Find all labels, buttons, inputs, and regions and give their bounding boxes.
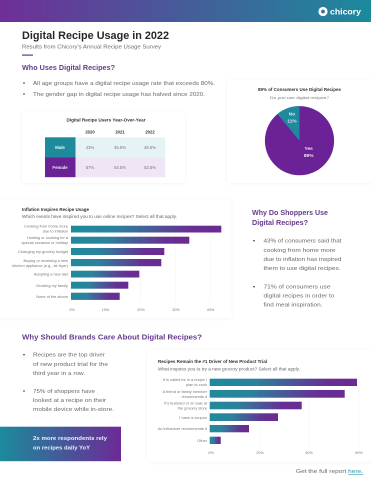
gridlines: [260, 375, 358, 447]
bars: [210, 379, 357, 444]
bar labels: Cooking from home more: [24, 224, 68, 228]
axis labels: 20%: [137, 308, 145, 312]
bar labels: Growing my family: [36, 283, 68, 288]
callout: 2x more respondents rely: [33, 436, 108, 442]
bar labels: due to inflation: [43, 229, 68, 234]
text block: why shoppers bullets: 43% of consumers said that: [264, 239, 342, 245]
header banner: [0, 0, 371, 22]
axis labels: 0%: [208, 451, 214, 455]
text block: who uses bullets: The gender gap in digital recipe usage has halved since 2020.: [33, 92, 205, 98]
bar labels: Adopting a new diet: [34, 272, 69, 277]
footer link text: Get the full report here.: [296, 469, 363, 475]
bar labels: recommends it: [181, 394, 208, 399]
text block: brands bullets: of new product trial for the: [33, 362, 108, 368]
axis labels: 20%: [256, 451, 264, 455]
bar labels: None of the above: [36, 294, 68, 299]
bar labels: It is called for in a recipe I: [163, 377, 207, 382]
text block: brands bullets: looked at a recipe on their: [33, 398, 106, 404]
pie labels: [287, 112, 314, 159]
table row: female: 54.5%: [114, 165, 126, 170]
table column headers: [85, 130, 155, 134]
pie subtitle: Do you use digital recipes?: [270, 95, 330, 100]
title: Digital Recipe Usage in 2022: [22, 30, 169, 42]
axis labels: 10%: [102, 308, 110, 312]
table row: male: 46.5%: [144, 145, 156, 150]
text block: why shoppers bullets: digital recipes in order to: [264, 294, 334, 300]
pie: no 11%: [277, 106, 300, 141]
title accent rule: [22, 54, 33, 56]
text block: brands bullets: 75% of shoppers have: [33, 389, 95, 395]
axis labels: 60%: [355, 451, 363, 455]
heading: why should brands care: Why Should Brands Care About Digital Recipes?: [22, 332, 202, 342]
table column headers: 2021: [115, 130, 125, 134]
axis labels: [208, 451, 363, 455]
axis labels: 40%: [207, 308, 215, 312]
chart title: Inflation Inspires Recipe Usage: [22, 207, 90, 212]
bar labels: plan to cook: [186, 382, 207, 387]
bar labels: An influencer recommends it: [158, 426, 208, 431]
text block: why shoppers bullets: them to use digital recipes.: [264, 266, 341, 272]
heading: why do shoppers use digital recipes: Digital Recipes?: [252, 218, 308, 227]
text block: why shoppers bullets: 71% of consumers use: [264, 285, 330, 291]
table row: male: Male: [55, 145, 65, 150]
chart title: Recipes Remain the #1 Driver of New Product Trial: [158, 359, 267, 364]
bar labels: [158, 377, 208, 443]
bar labels: [12, 224, 69, 299]
table row: male: 45.5%: [114, 145, 126, 150]
chart subtitle: What inspires you to try a new grocery product? Select all that apply.: [158, 366, 300, 372]
text block: brands bullets: mobile device while in-store.: [33, 407, 115, 413]
pie labels: No: [289, 112, 295, 118]
pie labels: Yes: [305, 146, 313, 152]
gridlines: [106, 222, 210, 303]
pie labels: 11%: [287, 118, 297, 124]
table row: male: [45, 137, 165, 158]
bar labels: Other: [197, 438, 208, 443]
text block: brands bullets: [23, 353, 115, 413]
text block: why shoppers bullets: find meal inspiration.: [264, 303, 323, 309]
pie title: 89% of Consumers Use Digital Recipes: [258, 87, 342, 92]
bar labels: A friend or family member: [163, 389, 208, 394]
callout: [0, 427, 121, 461]
axis labels: [69, 308, 215, 312]
table column headers: 2022: [145, 130, 155, 134]
axis labels: 0%: [69, 308, 75, 312]
bar labels: the grocery store: [178, 406, 207, 410]
text block: brands bullets: third year in a row.: [33, 371, 86, 377]
bar labels: Hosting or cooking for a: [27, 235, 69, 240]
callout: on recipes daily YoY: [33, 445, 90, 451]
table row: female: 53.5%: [144, 165, 156, 170]
pie labels: 89%: [304, 153, 314, 159]
heading: who uses digital recipes: Who Uses Digital Recipes?: [22, 63, 115, 72]
text block: who uses bullets: [23, 81, 215, 98]
text block: brands bullets: Recipes are the top driver: [33, 353, 105, 359]
table row: male: 43%: [86, 145, 94, 150]
panel: pie chart: [227, 80, 371, 183]
panel: year-over-year table: [22, 111, 185, 183]
text block: why shoppers bullets: cooking from home more: [264, 248, 336, 254]
bar labels: Changing my grocery budget: [18, 249, 69, 254]
bar labels: special occasion or holiday: [22, 240, 68, 245]
text block: who uses bullets: All age groups have a digital recipe usage rate that exceeds 80%.: [33, 81, 215, 87]
axis labels: 40%: [305, 451, 313, 455]
bar labels: I have a coupon: [179, 415, 207, 420]
panel: inflation bar chart: [0, 199, 232, 318]
table row: female: 57%: [86, 165, 94, 170]
bar labels: Buying or receiving a new: [23, 258, 68, 263]
heading: why do shoppers use digital recipes: Why Do Shoppers Use: [252, 208, 328, 217]
bar labels: kitchen appliance (e.g., air fryer): [12, 263, 69, 268]
chart subtitle: Which events have inspired you to use online recipes? Select all that apply.: [22, 214, 177, 219]
axis labels: 30%: [172, 308, 180, 312]
text block: why shoppers bullets: [253, 239, 342, 309]
pie: yes 89%: [265, 106, 334, 175]
text block: why shoppers bullets: due to inflation has inspired: [264, 257, 342, 263]
subtitle: Results from Chicory's Annual Recipe Usage Survey: [22, 44, 161, 50]
table title: Digital Recipe Users Year-Over-Year: [66, 118, 146, 122]
panel: new product trial bar chart: [147, 350, 371, 462]
heading: why do shoppers use digital recipes: [252, 208, 328, 227]
table column headers: 2020: [85, 130, 95, 134]
bars: [71, 226, 221, 300]
table row: female: [45, 158, 165, 177]
table row: female: Female: [52, 165, 68, 170]
bar labels: It's featured or on sale at: [164, 400, 208, 406]
logo: chicory: chicory: [330, 6, 361, 16]
